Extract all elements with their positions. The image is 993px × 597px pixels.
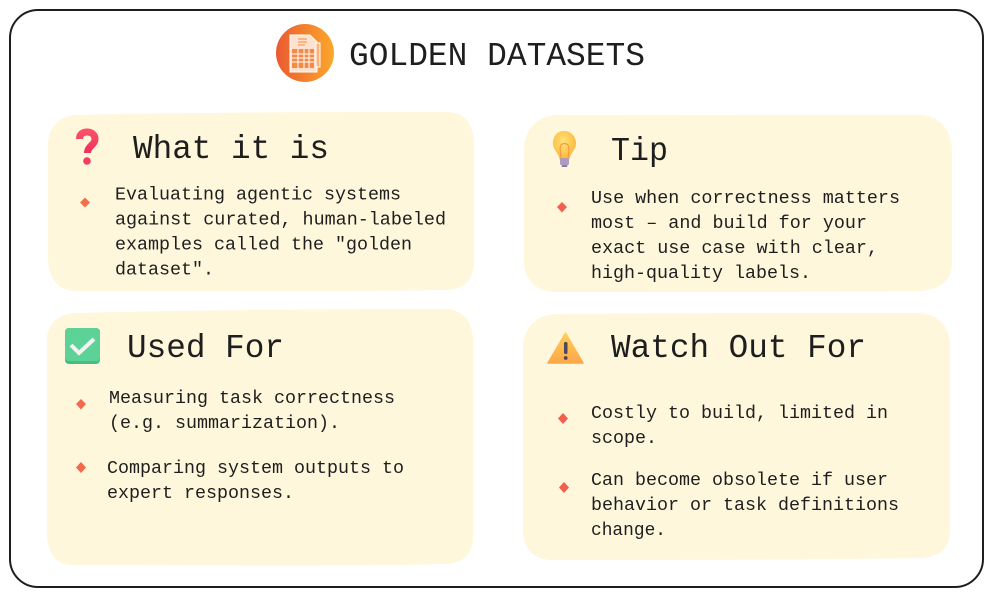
body text: Evaluating agentic systems: [115, 186, 401, 206]
body text: [115, 186, 446, 280]
icon: question mark: [80, 132, 95, 165]
body text: against curated, human-labeled: [115, 210, 446, 230]
body text: change.: [591, 521, 666, 541]
body text: expert responses.: [107, 484, 294, 504]
icon: dataset document: [276, 24, 334, 82]
body text: Comparing system outputs to: [107, 459, 404, 479]
panel: watch out for: [523, 313, 950, 560]
heading: Tip: [611, 133, 668, 170]
body text: dataset".: [115, 260, 214, 280]
body text: exact use case with clear,: [591, 239, 878, 259]
body text: most – and build for your: [591, 214, 867, 234]
title block: [276, 24, 645, 82]
body text: (e.g. summarization).: [109, 414, 340, 434]
icon: warning triangle: [548, 333, 583, 363]
bullets: [558, 413, 569, 493]
body text: Use when correctness matters: [591, 189, 900, 209]
body text: high-quality labels.: [591, 264, 811, 284]
icon: check box: [65, 328, 100, 364]
body text: examples called the "golden: [115, 236, 412, 256]
heading: Used For: [127, 330, 284, 367]
heading: What it is: [133, 131, 329, 168]
icon: light bulb: [553, 131, 576, 167]
body text: behavior or task definitions: [591, 496, 899, 516]
bullets: [76, 399, 86, 473]
title: GOLDEN DATASETS: [349, 38, 645, 75]
body text: [107, 389, 404, 504]
body text: Costly to build, limited in: [591, 404, 888, 424]
body text: [591, 189, 900, 284]
body text: [591, 404, 899, 541]
bullet: [557, 202, 567, 212]
body text: scope.: [591, 429, 657, 449]
panel: used for: [47, 309, 473, 566]
panel: tip: [524, 115, 952, 292]
body text: Can become obsolete if user: [591, 471, 888, 491]
body text: Measuring task correctness: [109, 389, 395, 409]
heading: Watch Out For: [611, 330, 866, 367]
bullet: [80, 198, 90, 208]
panel: what it is: [48, 112, 474, 291]
